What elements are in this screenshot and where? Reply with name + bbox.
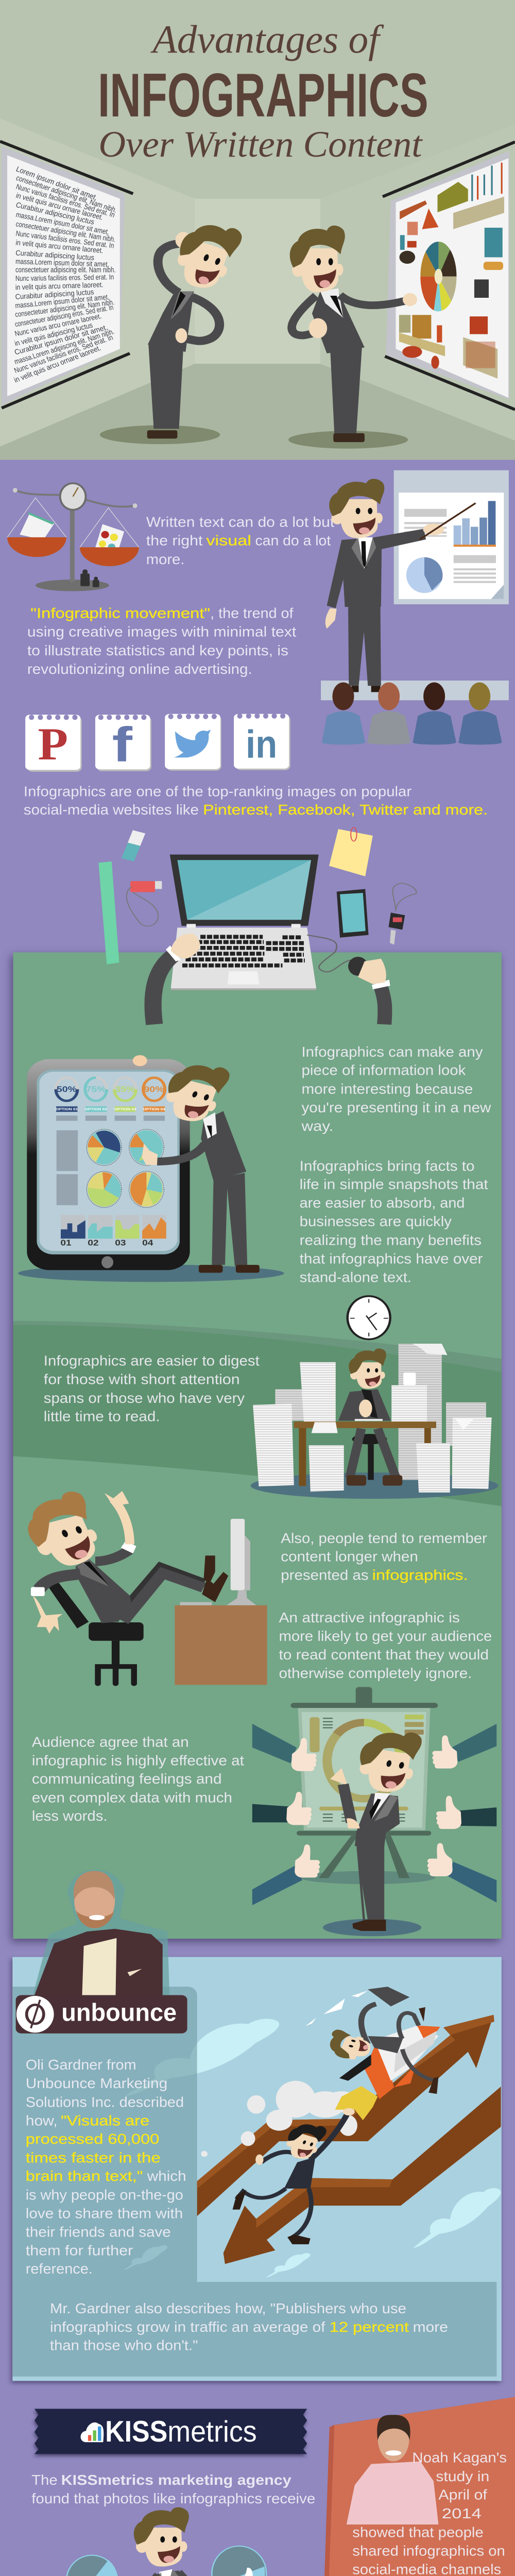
- left projector screen with text: massa.Lorem adipiscing elit. Nam nibh.: [13, 328, 115, 366]
- text: audience agree: Audience agree that an: [32, 1734, 189, 1750]
- figure: easel chart with man: [290, 1687, 438, 1936]
- section: green middle: [13, 1296, 502, 1685]
- section: purple intro: [7, 470, 509, 818]
- text: easier to digest: little time to read.: [44, 1408, 160, 1425]
- left projector screen with text: massa.Lorem ipsum dolor sit amet,: [15, 211, 110, 236]
- left projector screen with text: in velit quis arcu ornare laoreet.: [15, 239, 104, 255]
- left projector screen with text: Curabitur ipsum dolor sit amet,: [13, 324, 109, 357]
- text: easier to digest: Infographics are easier to digest: [44, 1352, 260, 1369]
- text: new way: way.: [301, 1117, 333, 1134]
- figure: giant tablet with charts: 01: [60, 1238, 72, 1247]
- text: easier to digest: for those with short attention: [44, 1371, 240, 1387]
- icon: key: [388, 883, 417, 945]
- text: audience agree: [32, 1734, 244, 1824]
- text: facts to life: [300, 1158, 488, 1285]
- text: publishers traffic: 12 percent: [330, 2318, 409, 2335]
- left projector screen with text: in velit quis arcu ornare laoreet.: [15, 281, 104, 292]
- text: visuals processed: how,: [26, 2112, 58, 2129]
- icon: pinterest card: [25, 715, 82, 772]
- text: top ranking images: social-media websites like: [24, 801, 199, 818]
- section: green bottom and blue top: [12, 1687, 502, 2381]
- icon: balance scale: [7, 482, 139, 591]
- icon: wall clock: [348, 1296, 390, 1339]
- text: new way: more interesting because: [301, 1080, 473, 1097]
- text: attractive infographic: otherwise completely ignore.: [279, 1665, 472, 1681]
- text: audience agree: even complex data with much: [32, 1789, 232, 1806]
- figure: giant tablet with charts: 03: [115, 1238, 126, 1247]
- figure: happy businessman pointing: [288, 226, 417, 449]
- text: attractive infographic: [279, 1609, 492, 1681]
- left projector screen with text: consectetuer adipiscing elit. Nam nibh.: [14, 298, 115, 319]
- text: new way: [301, 1043, 491, 1134]
- left projector screen with text: Nunc varius facilisis eros. Sed erat. In: [13, 333, 114, 375]
- figure: giant tablet with charts: OPTION 03: [114, 1107, 136, 1111]
- text: written vs visual: [146, 514, 334, 567]
- text: audience agree: less words.: [32, 1808, 108, 1824]
- text: visuals processed: [26, 2112, 186, 2277]
- left projector screen with text: [0, 141, 133, 408]
- section: blue bottom: [26, 1987, 501, 2506]
- text: infographic movement: revolutionizing online advertising.: [27, 661, 252, 677]
- text: Oli Gardner intro: Oli Gardner from: [26, 2056, 136, 2073]
- panel: blue section: [12, 1957, 502, 2381]
- text: infographic movement: [27, 605, 296, 677]
- figure: giant tablet with charts: OPTION 01: [56, 1107, 78, 1111]
- left projector screen with text: consectetuer adipiscing elit, Nam nibh.: [15, 174, 118, 214]
- text: facts to life: life in simple snapshots that: [300, 1176, 488, 1192]
- figure: laptop and hands: [153, 855, 390, 1024]
- icon: smartphone: [337, 889, 369, 938]
- text: visuals processed: reference.: [26, 2261, 93, 2277]
- figure: thumbs-up hands right: [427, 1724, 496, 1903]
- text: remember longer: [281, 1530, 487, 1583]
- text: attractive infographic: An attractive infographic is: [279, 1609, 460, 1625]
- logo: KISSmetrics ribbon: metrics: [167, 2415, 257, 2448]
- panel: coral Noah Kagan: [317, 2397, 515, 2576]
- panel: header scene: [0, 0, 515, 460]
- text: facts to life: stand-alone text.: [300, 1269, 411, 1285]
- text: visuals processed: them for further: [26, 2242, 133, 2259]
- icon: clouds: [123, 2188, 501, 2277]
- text: facts to life: businesses are quickly: [300, 1213, 452, 1229]
- left projector screen with text: in velit quis arcu ornare laoreet.: [13, 344, 102, 384]
- text: infographic movement: to illustrate statistics and key points, is: [27, 642, 288, 658]
- text: easier to digest: spans or those who have very: [44, 1389, 245, 1406]
- text: publishers traffic: more: [413, 2318, 448, 2335]
- left projector screen with text: Curabitur adipiscing luctus: [15, 249, 95, 262]
- text: facts to life: are easier to absorb, and: [300, 1194, 465, 1211]
- text: top ranking images: Pinterest, Facebook, Twitter and more.: [203, 801, 488, 818]
- figure: giant tablet with charts: 02: [88, 1238, 99, 1247]
- icon: linkedin card: [234, 714, 290, 770]
- left projector screen with text: Nunc varius facilisis eros. Sed erat. In: [15, 183, 116, 219]
- icon: sticky note: [329, 827, 373, 876]
- logo: KISSmetrics ribbon: [35, 2409, 307, 2454]
- left projector screen with text: Lorem ipsum dolor sit amet,: [14, 165, 99, 202]
- figure: man hanging from arrow: [233, 2108, 355, 2244]
- icon: facebook card: [95, 715, 151, 772]
- figure: audience: [322, 682, 502, 744]
- panel: dark green wave: [13, 1325, 502, 1506]
- text: visuals processed: brain than text,": [26, 2168, 143, 2184]
- text: written vs visual: more.: [146, 551, 184, 567]
- text: visuals processed: processed 60,000: [26, 2131, 159, 2147]
- text: infographic movement: , the trend of: [210, 605, 294, 621]
- text: KISSmetrics agency: KISSmetrics marketing agency: [61, 2471, 291, 2488]
- left projector screen with text: Nunc varius facilisis eros. Sed erat. In: [15, 229, 115, 250]
- left projector screen with text: consectetuer adipiscing elit. Nam nibh.: [15, 220, 116, 244]
- text: Noah Kagan study: [352, 2524, 505, 2576]
- text: top ranking images: Infographics are one of the top-ranking images on popular: [24, 783, 411, 800]
- text: written vs visual: can do a lot: [255, 532, 331, 549]
- text: Noah Kagan heading: study in: [436, 2468, 489, 2484]
- icon: ruler: [98, 861, 119, 964]
- left projector screen with text: massa.Lorem ipsum dolor sit amet,: [15, 293, 110, 310]
- text: publishers traffic: [50, 2300, 448, 2353]
- text: Noah Kagan study: showed that people: [352, 2524, 484, 2540]
- figure: giant tablet with charts: 75%: [85, 1084, 106, 1094]
- text: remember longer: presented as: [281, 1567, 369, 1583]
- text: Noah Kagan heading: April of: [438, 2486, 487, 2503]
- text: visuals processed: "Visuals are: [61, 2112, 149, 2129]
- text: new way: piece of information look: [301, 1062, 466, 1078]
- text: Noah Kagan heading: 2014: [442, 2505, 482, 2521]
- icon: linkedin card: in: [246, 722, 277, 766]
- text: remember longer: infographics.: [372, 1567, 468, 1583]
- figure: photo of Oli Gardner: [33, 1870, 169, 1995]
- icon: pinterest card: P: [38, 718, 68, 769]
- section: stats and Noah Kagan: [4, 2397, 515, 2576]
- left projector screen with text: in velit quis adipiscing luctus: [13, 321, 94, 348]
- text: visuals processed: love to share them with: [26, 2205, 183, 2222]
- figure: relaxed man with feet on desk: [17, 1489, 267, 1685]
- icon: facebook card: f: [112, 717, 132, 772]
- text: infographic movement: using creative images with minimal text: [27, 623, 296, 640]
- logo: KISSmetrics ribbon: KISS: [105, 2415, 167, 2448]
- section: laptop and tablet: [18, 827, 491, 1285]
- figure: giant tablet with charts: OPTION 02: [85, 1107, 107, 1111]
- cloud in blue panel: [125, 2019, 279, 2096]
- left projector screen with text: massa.Lorem ipsum dolor sit amet,: [15, 258, 109, 268]
- figure: photo of Noah Kagan: [347, 2415, 438, 2524]
- decorative band: [13, 1321, 502, 1372]
- text: audience agree: communicating feelings and: [32, 1771, 221, 1787]
- text: visuals processed: their friends and save: [26, 2224, 171, 2240]
- left projector screen with text: Curabitur adipiscing luctus: [15, 288, 94, 301]
- text: KISSmetrics agency: found that photos like infographics receive: [31, 2490, 315, 2506]
- text: KISSmetrics agency: The: [31, 2471, 58, 2488]
- icon: twitter card: [165, 714, 221, 771]
- text: facts to life: that infographics have over: [300, 1250, 483, 1267]
- panel: text overlay: [12, 1987, 496, 2377]
- logo: unbounce: [16, 1995, 187, 2033]
- left projector screen with text: consectetuer adipiscing elit. Nam nibh.: [15, 266, 115, 274]
- text: new way: Infographics can make any: [301, 1043, 483, 1060]
- text: remember longer: content longer when: [281, 1548, 418, 1565]
- left projector screen with text: Nunc varius facilisis eros. Sed erat. In: [15, 273, 114, 283]
- icon: zigzag growth arrows: [197, 2015, 501, 2264]
- title: Advantages of: [150, 17, 384, 61]
- figure: giant tablet with charts: 50%: [57, 1084, 77, 1094]
- left projector screen with text: in velit quis arcu ornare laoreet.: [15, 192, 104, 222]
- text: facts to life: Infographics bring facts to: [300, 1158, 475, 1174]
- text: Noah Kagan heading: [412, 2449, 507, 2521]
- left projector screen with text: consectetuer adipiscing eros. Sed erat. In: [14, 303, 114, 329]
- text: easier to digest: [44, 1352, 260, 1425]
- text: publishers traffic: Mr. Gardner also describes how, "Publishers who use: [50, 2300, 406, 2316]
- figure: giant tablet with charts: [18, 1055, 284, 1282]
- left projector screen with text: Nunc varius arcu ornare laoreet.: [14, 312, 102, 338]
- title: [98, 17, 428, 165]
- text: visuals processed: is why people on-the-go: [26, 2187, 183, 2203]
- figure: man on rocket: [201, 1987, 440, 2157]
- icon: usb drive: [127, 881, 162, 926]
- text: Oli Gardner intro: [26, 2056, 184, 2110]
- icon: eraser: [122, 830, 145, 861]
- title: Over Written Content: [98, 124, 423, 165]
- figure: confused businessman: [100, 215, 245, 444]
- text: written vs visual: Written text can do a lot but: [146, 514, 334, 530]
- left projector screen with text: Curabitur adipiscing luctus: [15, 201, 95, 227]
- text: KISSmetrics agency: [31, 2471, 315, 2506]
- text: audience agree: infographic is highly effective at: [32, 1752, 244, 1769]
- figure: thumbs-up hands left: [252, 1724, 320, 1905]
- figure: laughing man at tablet: [142, 1057, 260, 1273]
- logo: unbounce: unbounce: [61, 1998, 177, 2026]
- right projector screen with infographic: [383, 142, 515, 410]
- figure: giant tablet with charts: 90%: [144, 1084, 164, 1094]
- text: Oli Gardner intro: Unbounce Marketing: [26, 2075, 167, 2091]
- text: visuals processed: which: [147, 2168, 186, 2184]
- decorative card holes: [29, 714, 285, 720]
- figure: giant tablet with charts: 35%: [115, 1084, 135, 1094]
- text: facts to life: realizing the many benefits: [300, 1232, 482, 1248]
- figure: presenter with chart board: [321, 470, 509, 700]
- figure: overwhelmed man with paper stacks: [251, 1344, 498, 1499]
- text: visuals processed: times faster in the: [26, 2149, 161, 2166]
- text: publishers traffic: infographics grow in traffic an average of: [50, 2318, 325, 2335]
- text: publishers traffic: than those who don't.": [50, 2337, 198, 2353]
- panel: green section: [13, 952, 502, 1939]
- figure: man holding stats circles: [66, 2507, 266, 2576]
- text: infographic movement: "Infographic movement": [30, 605, 210, 621]
- text: Oli Gardner intro: Solutions Inc. described: [26, 2094, 184, 2110]
- text: top ranking images: [24, 783, 488, 818]
- text: written vs visual: the right: [146, 532, 203, 549]
- text: written vs visual: visual: [207, 532, 251, 549]
- figure: giant tablet with charts: OPTION 04: [143, 1107, 166, 1111]
- figure: giant tablet with charts: 04: [142, 1238, 153, 1247]
